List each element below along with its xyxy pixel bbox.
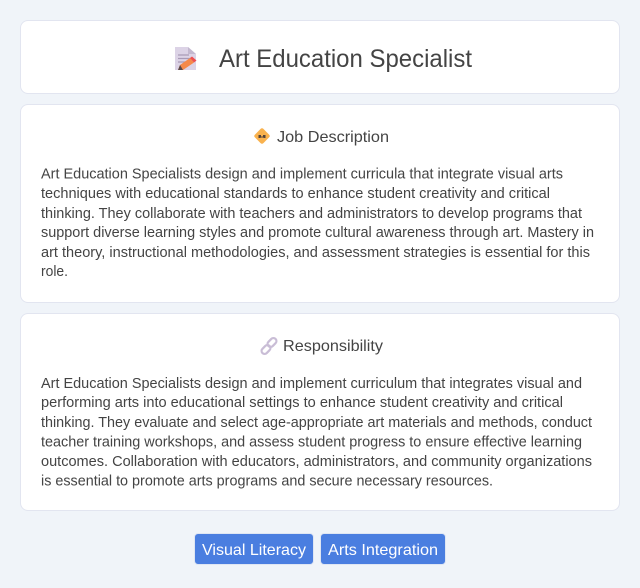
text block: job description: art theory, instructional methodologies, and assessment strategies is essential for this — [41, 245, 590, 261]
text block: responsibility: performing arts into educational settings to enhance student creativity and critical — [41, 395, 563, 411]
text block: job description — [41, 166, 594, 280]
text block: responsibility: Art Education Specialists design and implement curriculum that integrates visual and — [41, 376, 582, 392]
text block: job description: thinking. They collaborate with teachers and administrators to develop programs that — [41, 206, 582, 222]
panel: title header — [20, 20, 620, 94]
panel: job description: Job Description — [277, 129, 389, 146]
icon: chain link — [260, 337, 278, 355]
panel: responsibility — [20, 313, 620, 511]
text block: job description: techniques with educational standards to enhance student creativity and critical — [41, 186, 550, 202]
text block: job description: support diverse learning styles and promote cultural awareness through art. Mastery in — [41, 225, 594, 241]
icon: document with pencil — [175, 47, 196, 70]
tag: arts integration: Arts Integration — [328, 542, 438, 559]
text block: responsibility: teacher training workshops, and assess student progress to ensure effective learning — [41, 434, 582, 450]
panel: responsibility: Responsibility — [283, 338, 383, 355]
tag: visual literacy: Visual Literacy — [202, 542, 306, 559]
text block: job description: Art Education Specialists design and implement curricula that integrate visual arts — [41, 166, 563, 182]
tag: arts integration — [320, 533, 446, 565]
panel: job description — [20, 104, 620, 303]
text block: responsibility: thinking. They evaluate and select age-appropriate art materials and methods, conduct — [41, 415, 592, 431]
text block: responsibility: outcomes. Collaboration with educators, administrators, and community organizations — [41, 454, 592, 470]
title: Art Education Specialist — [219, 45, 472, 73]
tag: visual literacy — [194, 533, 314, 565]
text block: responsibility: is essential to promote arts programs and secure necessary resources. — [41, 474, 493, 490]
text block: job description: role. — [41, 264, 68, 280]
icon: orange diamond sign — [254, 128, 270, 144]
